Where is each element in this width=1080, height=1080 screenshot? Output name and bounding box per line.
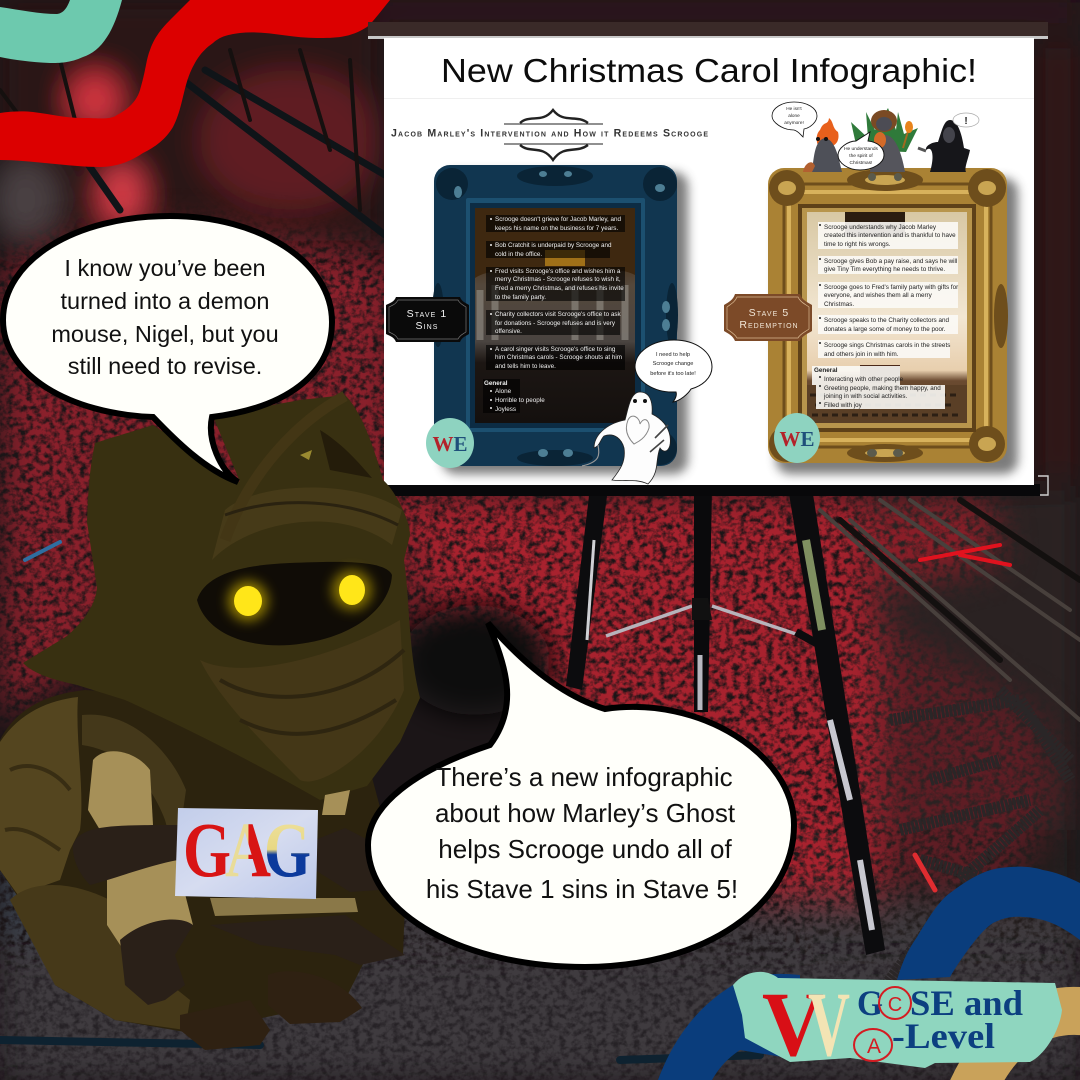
speech bubble: He understands: Christmas! (850, 160, 872, 166)
speech bubble: demon mouse: turned into a demon (60, 288, 270, 314)
speech bubble: demon mouse: still need to revise. (68, 353, 262, 379)
logo: WE left: WE (432, 432, 468, 456)
label: Stave 1 Sins: Sins (415, 320, 439, 332)
logo: WW GCSE and A-Level: SE and (910, 983, 1023, 1023)
text block: Stave 1 sins: Fred visits Scrooge's office and wishes him a (495, 268, 621, 275)
boots (180, 971, 362, 1050)
logo: WW GCSE and A-Level: C (888, 994, 902, 1016)
text block: Stave 5 redemption: Scrooge sings Christmas carols in the streets (824, 342, 950, 349)
speech bubble: He isn't alone anymore: anymore! (784, 120, 804, 125)
text block: Stave 1 sins: offensive. (495, 328, 522, 335)
text block: Stave 1 sins: merry Christmas - Scrooge refuses to wish it, (495, 276, 621, 283)
text block: Stave 5 redemption: Christmas. (824, 301, 854, 308)
text block: Stave 5 redemption: Interacting with other people (824, 376, 904, 383)
text block: Stave 1 sins: cold in the office. (495, 251, 542, 258)
face shadow and eyes (197, 562, 392, 645)
icon: Marley's ghost (582, 392, 670, 484)
text block: Stave 5 redemption: Greeting people, making them happy, and (824, 385, 941, 392)
icon: hooded ghost (918, 120, 970, 172)
text block: Stave 1 sins (483, 215, 625, 413)
logo: WE left (426, 418, 474, 468)
logo: WW GCSE and A-Level (733, 972, 1062, 1075)
white infographic board (384, 38, 1034, 485)
Stave 1 background picture (475, 208, 635, 423)
panel: blue frame Stave 1 (432, 165, 688, 474)
speech bubble: Marley: before it's too late! (650, 371, 696, 377)
text block: Stave 5 redemption: General (814, 367, 838, 374)
text block: Stave 5 redemption: donates a large some of money to the poor. (824, 326, 946, 333)
speech bubble: He understands (838, 132, 884, 170)
panel: gold frame Stave 5 (768, 168, 1018, 474)
tan squiggle (972, 1011, 1080, 1080)
red squiggle (0, 0, 390, 167)
text block: Stave 1 sins: for donations - Scrooge refuses and is very (495, 320, 616, 327)
speech bubble: He isn't alone anymore: He isn't (786, 106, 802, 111)
tan sleeves (88, 751, 358, 960)
logo: WW GCSE and A-Level: G (857, 983, 883, 1023)
logo: WW GCSE and A-Level: -Level (892, 1016, 995, 1056)
sign: GAG: G (183, 806, 231, 893)
speech bubble: He understands: He understands (844, 146, 879, 152)
label: Stave 1 Sins (386, 297, 469, 342)
speech bubble: new infographic: about how Marley’s Ghost (435, 798, 736, 828)
text block: Stave 5 redemption: everyone, and wishes them all a merry (824, 292, 933, 299)
text block: Stave 5 redemption: created this intervention and is thankful to have (824, 232, 956, 239)
text block: Stave 5 redemption: joining in with social activities. (823, 393, 908, 400)
logo: WE right: WE (779, 427, 815, 451)
blue squiggle (658, 867, 1080, 1080)
text block: Stave 1 sins: A carol singer visits Scrooge's office to sing (495, 346, 616, 353)
icon: leafy spirit character (851, 108, 918, 172)
speech bubble: demon mouse (3, 216, 332, 482)
sign: GAG (175, 806, 318, 899)
speech bubble: new infographic: helps Scrooge undo all of (438, 834, 732, 864)
text block: Stave 5 redemption: and others join in with him. (824, 351, 899, 358)
sign: GAG: G (264, 806, 311, 893)
speech bubble: exclamation (953, 113, 979, 127)
character: hooded mouse in brown robes (0, 395, 420, 1050)
text block: Stave 5 redemption: Scrooge goes to Fred's family party with gifts for (824, 284, 958, 291)
text block: Stave 1 sins: him Christmas carols - Scrooge shouts at him (495, 354, 622, 361)
text block: Stave 1 sins: keeps his name on the business for 7 years. (495, 225, 618, 232)
text block: Stave 5 redemption: give Tiny Tim everything he needs to thrive. (824, 266, 945, 273)
icon: flame-headed ghost (803, 118, 842, 172)
logo: WE right (774, 413, 820, 463)
heading: Jacob Marley's Intervention: Jacob Marley's Intervention and How it Redeems Scrooge (391, 128, 708, 140)
speech bubble: He isn't alone anymore (772, 102, 817, 137)
speech bubble: new infographic: his Stave 1 sins in Stave 5! (426, 874, 738, 904)
speech bubble: Marley (635, 340, 712, 402)
text block: Stave 5 redemption: time to right his wrongs. (824, 241, 891, 248)
speech bubble: He understands: the spirit of (849, 153, 873, 159)
text block: Stave 1 sins: General (484, 380, 508, 387)
text block: Stave 1 sins: Fred a merry Christmas, and refuses his invite (495, 285, 624, 292)
gloves and straps (73, 825, 405, 1005)
logo: WW GCSE and A-Level: A (867, 1035, 881, 1058)
text block: Stave 1 sins: Alone (495, 388, 512, 395)
speech bubble: demon mouse: I know you’ve been (64, 255, 266, 281)
speech bubble: new infographic (368, 623, 794, 967)
label: Stave 5 Redemption: Stave 5 (749, 307, 789, 319)
text block: Stave 1 sins: Scrooge doesn't grieve for Jacob Marley, and (495, 216, 622, 223)
speech bubble: demon mouse: mouse, Nigel, but you (51, 321, 279, 347)
text block: Stave 1 sins: Horrible to people (495, 397, 545, 404)
board title: New Christmas Carol Infographic! (441, 52, 977, 89)
heading: Jacob Marley's Intervention (391, 110, 708, 160)
text block: Stave 1 sins: Joyless (495, 406, 516, 413)
text block: Stave 5 redemption: Filled with joy (824, 402, 863, 409)
text block: Stave 1 sins: and tells him to leave. (495, 363, 556, 370)
text block: Stave 5 redemption: Scrooge speaks to the Charity collectors and (824, 317, 949, 324)
logo: WW GCSE and A-Level: V (808, 973, 850, 1075)
text block: Stave 5 redemption (812, 222, 958, 409)
label: Stave 5 Redemption: Redemption (739, 319, 799, 331)
board shadow bar (380, 484, 1040, 496)
speech bubble: Marley: I need to help (656, 352, 690, 358)
body robe (0, 690, 405, 1032)
text block: Stave 5 redemption: Scrooge understands why Jacob Marley (824, 224, 937, 231)
text block: Stave 1 sins: Bob Cratchit is underpaid by Scrooge and (495, 242, 612, 249)
logo: WW GCSE and A-Level: V (762, 973, 824, 1075)
speech bubble: exclamation: ! (964, 116, 968, 127)
text block: Stave 5 redemption: Scrooge gives Bob a pay raise, and says he will (824, 258, 957, 265)
speech bubble: new infographic: There’s a new infographic (435, 762, 733, 792)
label: Stave 5 Redemption (724, 294, 812, 341)
easel legs (566, 476, 1048, 955)
speech bubble: Marley: Scrooge change (653, 361, 693, 367)
speech bubble: He isn't alone anymore: alone (788, 113, 800, 118)
Stave 5 background picture (807, 212, 967, 423)
label: Stave 1 Sins: Stave 1 (407, 308, 447, 320)
hood (23, 395, 420, 800)
board top bar (368, 22, 1048, 39)
text block: Stave 1 sins: Charity collectors visit Scrooge's office to ask (495, 311, 622, 318)
teal squiggle (0, 0, 122, 63)
text block: Stave 1 sins: to the family party. (495, 294, 546, 301)
sign: GAG: A (225, 806, 271, 893)
